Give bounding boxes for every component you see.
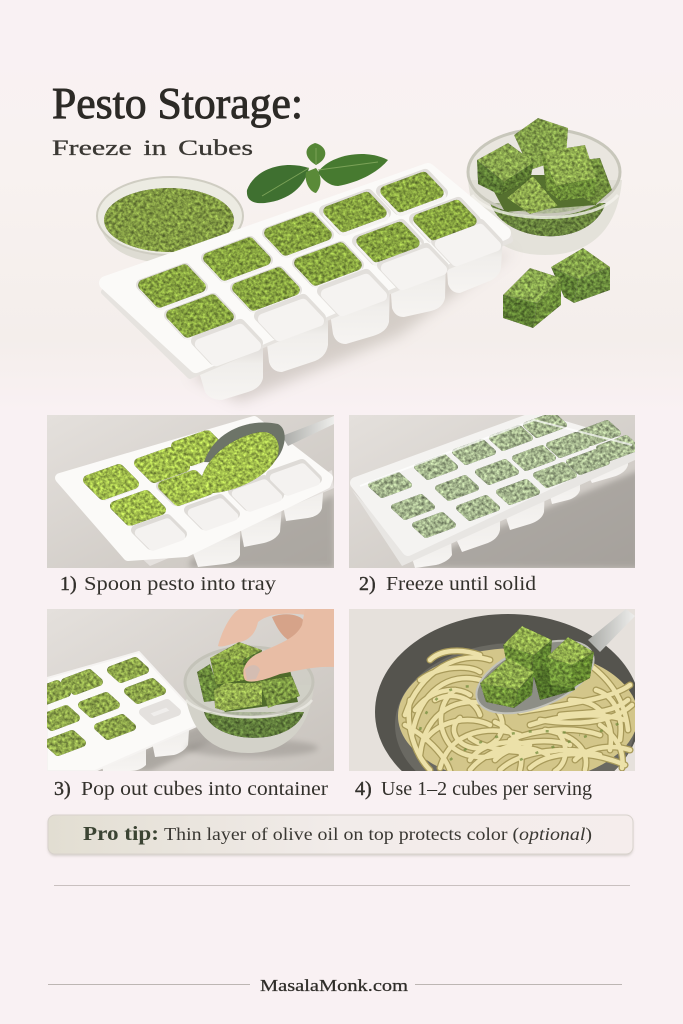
panel: step 1 spoon pesto	[47, 415, 334, 568]
tray covered with plastic wrap	[352, 415, 640, 568]
loose frozen cubes	[503, 248, 610, 328]
caption: step 3: 3)	[54, 778, 71, 800]
hand holding cube	[218, 609, 334, 682]
small tray	[33, 652, 215, 771]
basil leaves	[247, 143, 388, 203]
hero photo: tray, bowls, basil and cubes	[0, 60, 683, 410]
tray wells	[142, 175, 497, 361]
tray rim edge	[104, 228, 510, 376]
title: Pesto Storage:	[52, 79, 303, 128]
spoon with pesto	[200, 416, 334, 493]
caption: step 4: 4)	[355, 778, 372, 800]
caption: step 1: 1)	[60, 573, 77, 595]
callout: pro tip: Thin layer of olive oil on top protects color ( optional )	[164, 824, 592, 845]
glass bowl with cubes	[184, 642, 318, 757]
white ice cube tray with pesto	[104, 170, 515, 402]
callout: pro tip: Pro tip:	[83, 824, 159, 845]
callout: pro tip	[48, 815, 633, 856]
caption: step 1: Spoon pesto into tray	[84, 573, 276, 595]
caption: step 2: 2)	[359, 573, 376, 595]
footer website: MasalaMonk.com	[260, 976, 408, 995]
panel: step 4 use cubes	[349, 609, 635, 771]
subtitle: Freeze in Cubes	[52, 135, 253, 160]
panel: step 3 pop out cubes	[33, 609, 334, 771]
right bowl with frozen cubes	[468, 118, 622, 255]
caption: step 4: Use 1–2 cubes per serving	[381, 778, 592, 800]
tray legs	[197, 234, 503, 400]
panel: step 2 freeze	[349, 415, 640, 568]
hero surface	[0, 60, 683, 410]
caption: step 3: Pop out cubes into container	[81, 778, 328, 800]
tray rim top	[106, 170, 504, 366]
pesto in tray	[144, 177, 471, 332]
tray with pesto and wells	[60, 421, 334, 568]
dark pan	[375, 614, 635, 771]
left bowl of pesto	[97, 177, 243, 263]
pasta	[398, 648, 638, 784]
caption: step 2: Freeze until solid	[386, 573, 536, 595]
spoon with cubes	[476, 612, 634, 714]
